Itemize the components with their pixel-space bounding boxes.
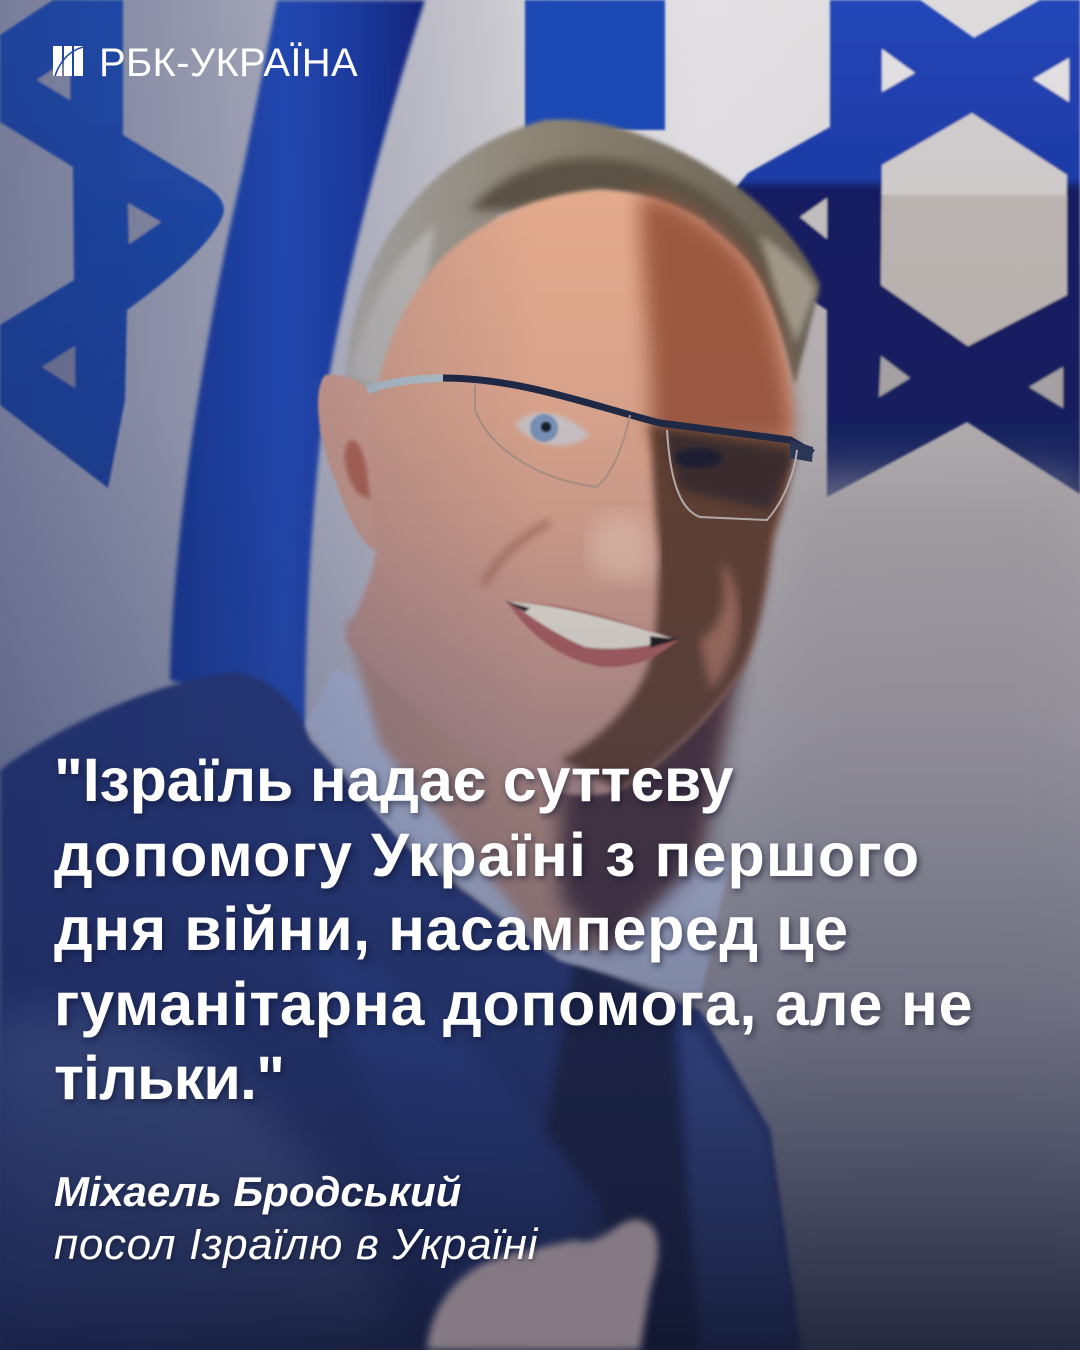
- jacket: [0, 672, 800, 1350]
- cheek highlight: [700, 560, 739, 690]
- flag fold blue band: [170, 0, 425, 730]
- eye left: [515, 413, 590, 445]
- forehead warm shade: [640, 194, 793, 440]
- shirt collar: [305, 668, 730, 1000]
- ear: [318, 375, 385, 551]
- glasses: [367, 378, 813, 520]
- quote: тільки.": [54, 1044, 284, 1112]
- attribution: Міхаель Бродський: [54, 1168, 461, 1215]
- flag star left: [0, 0, 224, 488]
- lower cloth tone: [760, 480, 1080, 1350]
- flag top blue block: [525, 0, 665, 130]
- quote: дня війни, насамперед це: [54, 895, 849, 963]
- quote: [54, 746, 976, 1112]
- icon: logo mark: [53, 46, 83, 76]
- face: [345, 190, 793, 795]
- attribution: посол Ізраїлю в Україні: [54, 1220, 538, 1269]
- brand name: РБК-УКРАЇНА: [99, 41, 358, 85]
- hand: [427, 1220, 658, 1350]
- quote: гуманітарна допомога, але не: [54, 970, 973, 1038]
- face shadow side: [560, 425, 795, 790]
- neck: [345, 620, 740, 950]
- nose: [590, 513, 655, 582]
- hair: [345, 119, 820, 420]
- flag star right: [700, 0, 1080, 497]
- mouth: [505, 601, 680, 667]
- attribution: [54, 1168, 538, 1270]
- quote: допомогу Україні з першого: [54, 820, 920, 888]
- quote: "Ізраїль надає суттєву: [54, 746, 733, 814]
- smile line: [483, 522, 550, 585]
- eye right in shadow: [665, 432, 795, 510]
- logo: РБК-Україна: [53, 41, 358, 85]
